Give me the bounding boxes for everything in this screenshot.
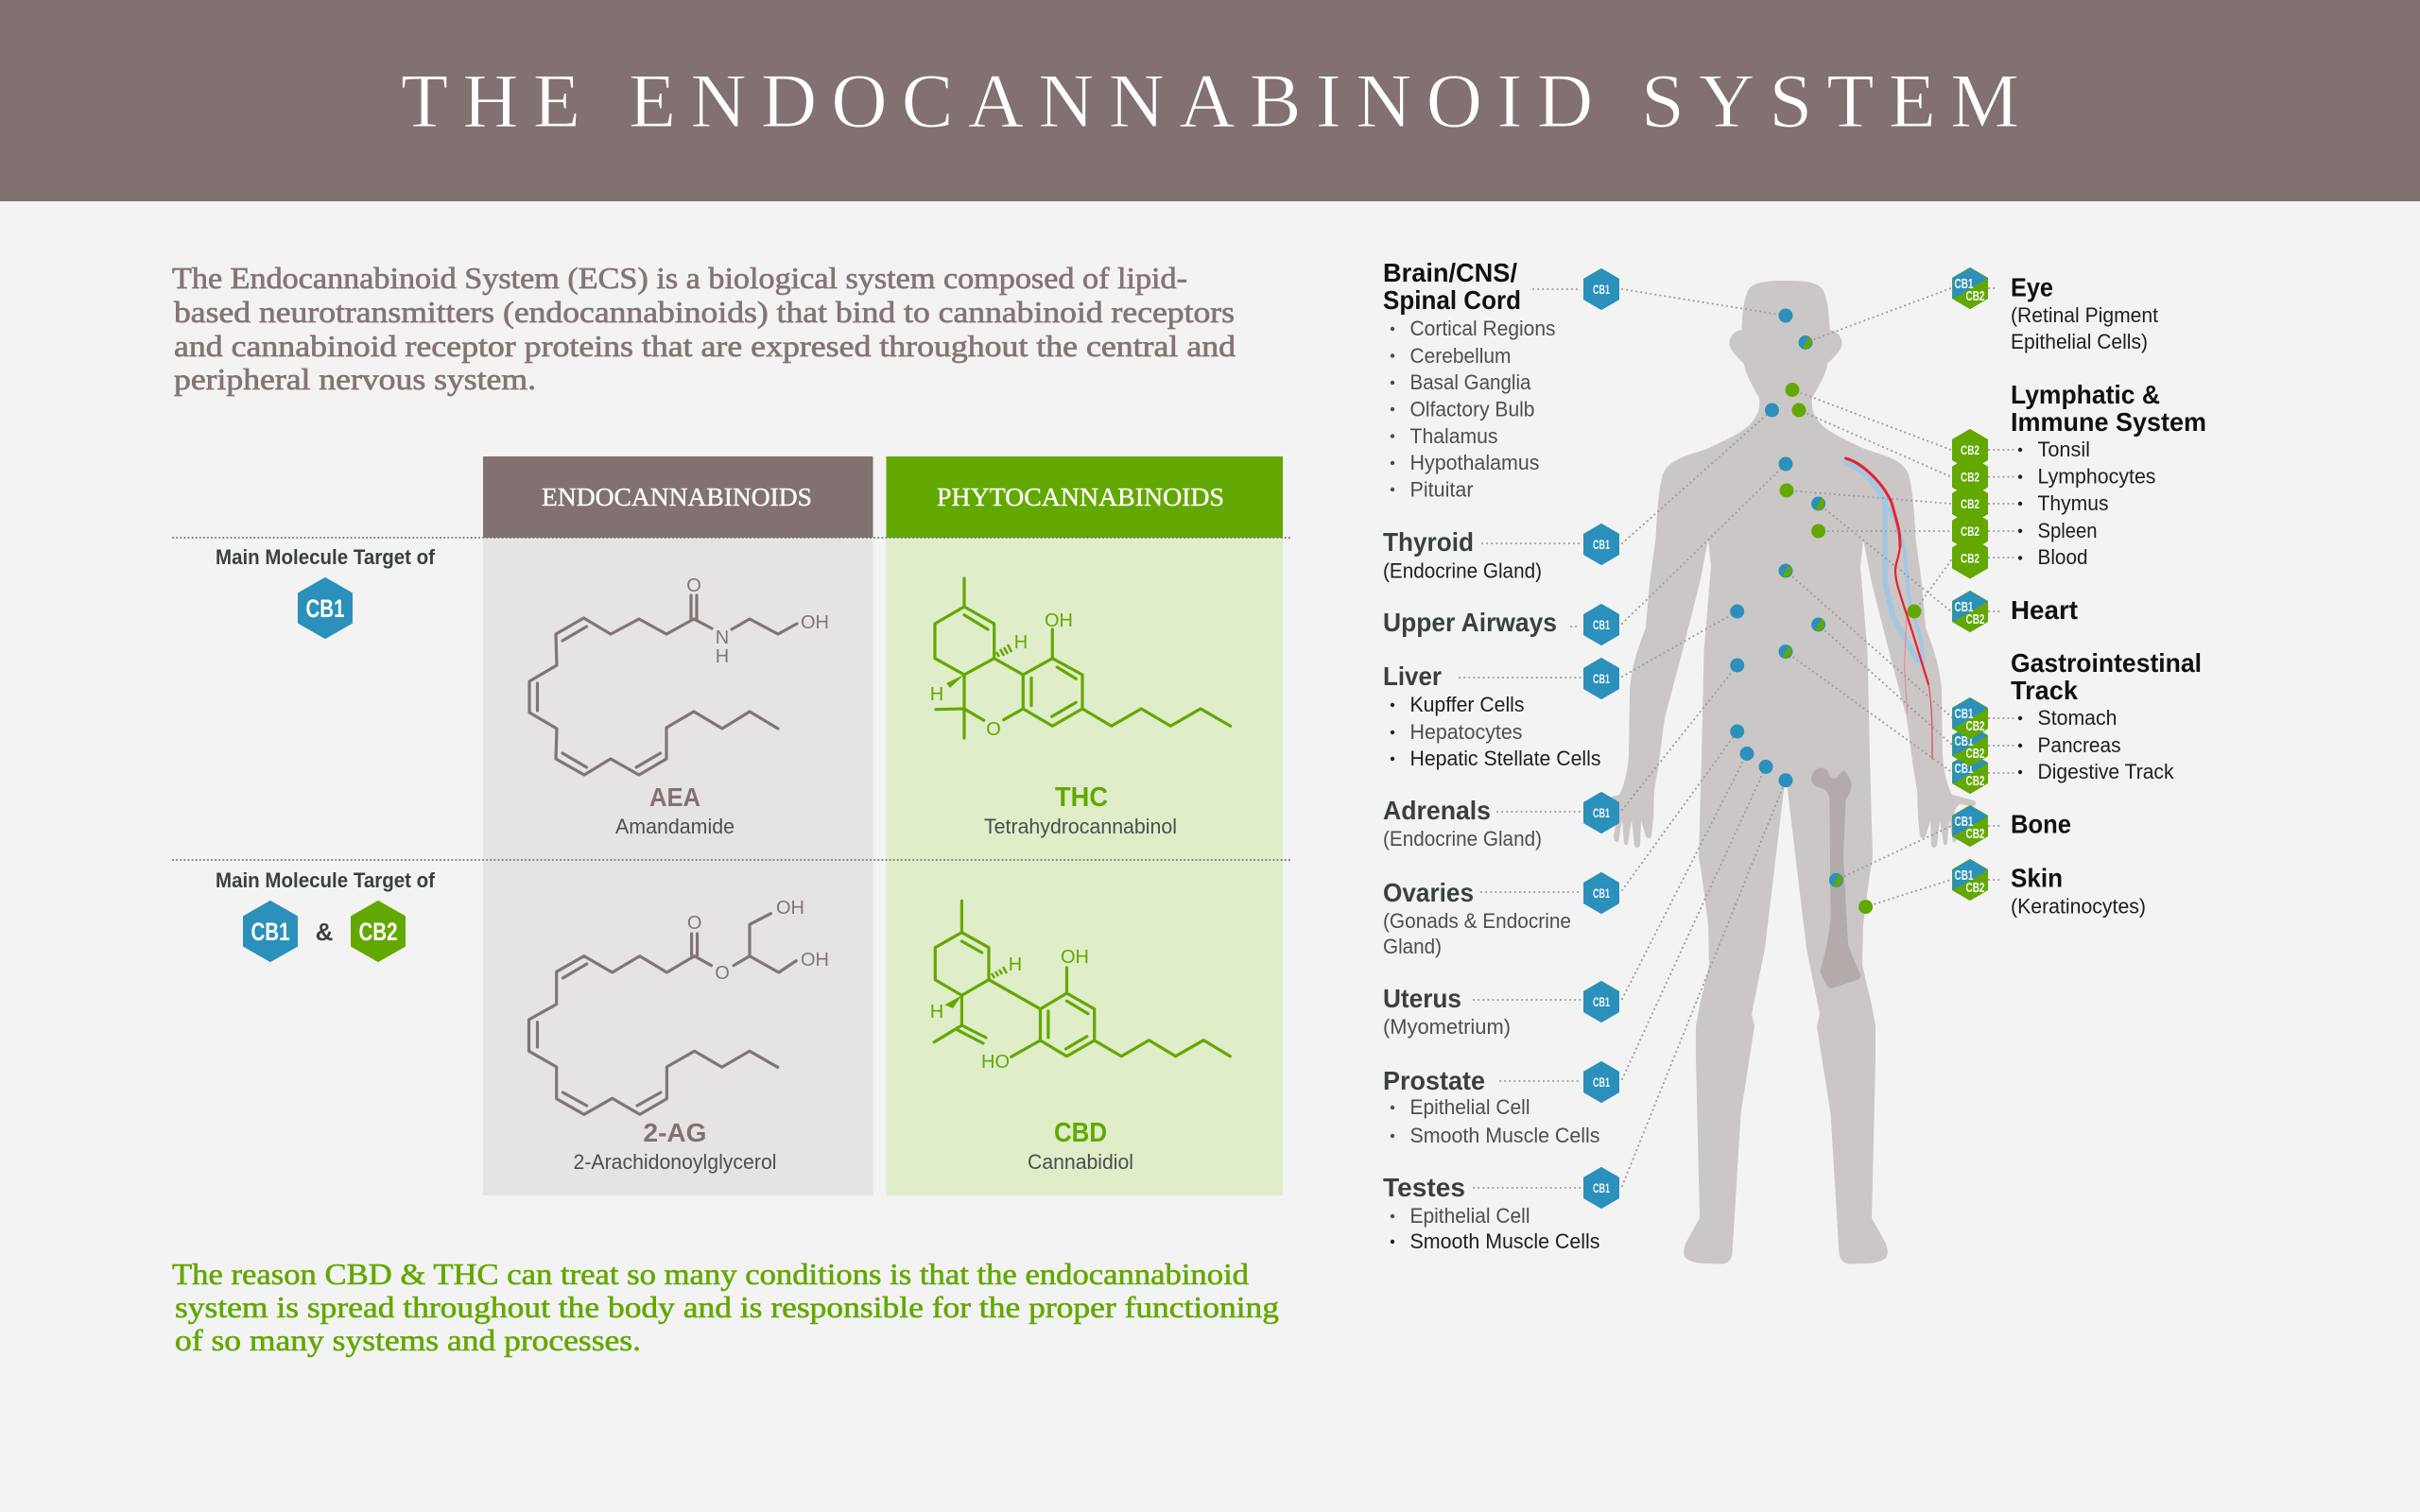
label: brain: Brain/CNS/ xyxy=(1383,258,1517,287)
title banner xyxy=(0,0,2420,201)
label: uterus: (Myometrium) xyxy=(1383,1015,1511,1039)
row label: CB1 and CB2 target: Main Molecule Target of xyxy=(216,868,436,892)
molecule: THC: H xyxy=(930,684,943,705)
label: brain xyxy=(1383,258,1556,501)
CB1 and CB2 hexagon stack: gastrointestinal: CB1 xyxy=(1955,733,1974,749)
label: bone: Bone xyxy=(2011,809,2071,839)
intro paragraph: based neurotransmitters (endocannabinoids) that bind to cannabinoid receptors xyxy=(174,295,1235,329)
label: testes xyxy=(1383,1173,1599,1253)
label: brain: Olfactory Bulb xyxy=(1410,397,1535,421)
row label: CB1 target: CB1 xyxy=(306,594,344,623)
label: lymphatic and immune system: Spleen xyxy=(2038,519,2097,542)
label: gastrointestinal track: Gastrointestinal xyxy=(2011,648,2202,678)
label: brain: Cortical Regions xyxy=(1410,317,1556,340)
CB1 and CB2 hexagon: eye xyxy=(1953,268,1987,308)
CB1 hexagon: uterus xyxy=(1584,982,1618,1022)
molecule: 2-AG: 2-Arachidonoylglycerol xyxy=(573,1150,777,1174)
CB1 and CB2 hexagon: skin xyxy=(1953,860,1987,900)
molecule: 2-AG xyxy=(529,898,829,1174)
label: thyroid xyxy=(1383,527,1542,582)
title banner: THE ENDOCANNABINOID SYSTEM xyxy=(401,58,2019,144)
CB1 and CB2 hexagon stack: gastrointestinal: CB2 xyxy=(1966,746,1985,762)
row label: CB1 and CB2 target: & xyxy=(316,918,333,946)
label: liver xyxy=(1383,662,1601,770)
panel: endocannabinoids column: ENDOCANNABINOIDS xyxy=(542,483,812,511)
molecule: 2-AG: O xyxy=(715,963,730,984)
CB1 hexagon: ovaries xyxy=(1584,873,1618,913)
label: lymphatic and immune system: Thymus xyxy=(2038,491,2108,515)
molecule: AEA: N xyxy=(716,627,729,648)
label: gastrointestinal track: Track xyxy=(2011,676,2078,705)
molecule: THC: Tetrahydrocannabinol xyxy=(984,815,1177,838)
molecule: AEA: AEA xyxy=(649,782,700,812)
label: adrenals: Adrenals xyxy=(1383,796,1491,825)
CB1 and CB2 hexagon: eye: CB2 xyxy=(1966,288,1985,304)
label: brain: Basal Ganglia xyxy=(1410,370,1531,394)
molecule: THC xyxy=(930,578,1231,838)
molecule: AEA: Amandamide xyxy=(615,815,735,838)
CB2 hexagon stack: lymphatic and immune: CB2 xyxy=(1961,442,1979,457)
label: testes: Epithelial Cell xyxy=(1410,1204,1530,1228)
CB1 hexagon: brain xyxy=(1584,269,1618,309)
molecule: 2-AG: 2-AG xyxy=(643,1118,707,1147)
CB2 hexagon stack: lymphatic and immune: CB2 xyxy=(1961,496,1979,511)
label: prostate: Smooth Muscle Cells xyxy=(1410,1124,1599,1147)
receptor dots on body xyxy=(1730,308,1921,914)
label: brain: Hypothalamus xyxy=(1410,451,1539,474)
intro paragraph xyxy=(172,261,1236,396)
molecule: CBD xyxy=(930,901,1230,1174)
label: prostate: Epithelial Cell xyxy=(1410,1095,1530,1119)
molecule: CBD: Cannabidiol xyxy=(1028,1150,1133,1174)
label: brain: Pituitar xyxy=(1410,478,1473,501)
label: lymphatic and immune system: Lymphocytes xyxy=(2038,465,2155,489)
label: eye: Eye xyxy=(2011,272,2053,302)
label: ovaries xyxy=(1383,878,1571,958)
label: lymphatic and immune system: Immune System xyxy=(2011,407,2206,437)
CB1 and CB2 hexagon stack: gastrointestinal xyxy=(1953,698,1987,793)
CB1 hexagon: thyroid: CB1 xyxy=(1593,537,1610,552)
molecule: CBD: CBD xyxy=(1054,1118,1107,1148)
molecule: THC: H xyxy=(1014,632,1028,653)
label: eye xyxy=(2011,272,2158,353)
label: skin: Skin xyxy=(2011,864,2063,892)
panel: endocannabinoids column xyxy=(483,456,873,1195)
label: liver: Liver xyxy=(1383,662,1442,691)
intro paragraph: and cannabinoid receptor proteins that are expresed throughout the central and xyxy=(174,329,1236,363)
CB2 dots xyxy=(1779,336,1921,914)
row dividers xyxy=(173,538,1290,860)
label: gastrointestinal track: Stomach xyxy=(2038,706,2118,730)
label: gastrointestinal track xyxy=(2011,648,2202,783)
molecule: 2-AG: OH xyxy=(801,950,829,971)
CB1 and CB2 hexagon: bone xyxy=(1953,806,1987,846)
CB1 hexagon: liver xyxy=(1584,659,1618,698)
molecule: AEA xyxy=(529,576,829,838)
label: ovaries: Gland) xyxy=(1383,935,1442,958)
CB1 and CB2 hexagon stack: gastrointestinal: CB1 xyxy=(1955,706,1974,722)
CB2 hexagon stack: lymphatic and immune: CB2 xyxy=(1961,470,1979,485)
conclusion paragraph xyxy=(172,1257,1279,1357)
molecule: 2-AG: O xyxy=(687,913,701,934)
label: lymphatic and immune system xyxy=(2011,380,2206,569)
label: prostate: Prostate xyxy=(1383,1066,1485,1095)
label: lymphatic and immune system: Lymphatic & xyxy=(2011,380,2160,409)
arm blood vessels xyxy=(1845,458,1932,759)
label: testes: Testes xyxy=(1383,1173,1465,1202)
CB1 and CB2 hexagon: heart xyxy=(1953,592,1987,631)
CB1 and CB2 hexagon: skin: CB2 xyxy=(1966,880,1985,896)
CB1 and CB2 hexagon: eye: CB1 xyxy=(1955,276,1974,292)
panel: phytocannabinoids column: PHYTOCANNABINOIDS xyxy=(937,483,1224,511)
label: upper airways: Upper Airways xyxy=(1383,608,1557,637)
label: liver: Hepatocytes xyxy=(1410,720,1522,744)
row label: CB1 target: Main Molecule Target of xyxy=(216,545,436,569)
row label: CB1 and CB2 target: CB1 xyxy=(251,918,289,946)
label: gastrointestinal track: Pancreas xyxy=(2038,733,2121,757)
CB1 hexagon: liver: CB1 xyxy=(1593,671,1610,686)
label: adrenals xyxy=(1383,796,1542,850)
CB1 hexagon: adrenals: CB1 xyxy=(1593,805,1610,820)
molecule: THC: O xyxy=(986,719,1001,740)
body silhouette xyxy=(1596,281,1976,1264)
CB1 and CB2 hexagon: heart: CB1 xyxy=(1955,599,1974,615)
molecule: THC: THC xyxy=(1055,782,1108,813)
label: uterus xyxy=(1383,984,1511,1039)
CB1 hexagon: prostate xyxy=(1584,1062,1618,1102)
CB1 hexagon: uterus: CB1 xyxy=(1593,994,1610,1009)
label: brain: Cerebellum xyxy=(1410,344,1511,368)
row label: CB1 and CB2 target xyxy=(216,868,436,961)
CB1 dots xyxy=(1730,308,1843,887)
conclusion paragraph: of so many systems and processes. xyxy=(175,1323,641,1357)
CB1 and CB2 hexagon stack: gastrointestinal: CB2 xyxy=(1966,718,1985,734)
conclusion paragraph: The reason CBD & THC can treat so many conditions is that the endocannabinoid xyxy=(172,1257,1249,1291)
CB1 and CB2 hexagon stack: gastrointestinal: CB1 xyxy=(1955,761,1974,777)
label: thyroid: Thyroid xyxy=(1383,527,1474,557)
label: ovaries: (Gonads & Endocrine xyxy=(1383,909,1571,933)
molecule: AEA: H xyxy=(716,646,729,667)
row label: CB1 target xyxy=(216,545,436,638)
molecule: THC: OH xyxy=(1045,610,1073,631)
molecule: AEA: OH xyxy=(801,612,829,633)
CB1 hexagon: upper airways: CB1 xyxy=(1593,617,1610,632)
molecule: CBD: HO xyxy=(981,1052,1010,1073)
label: skin: (Keratinocytes) xyxy=(2011,894,2146,919)
label: gastrointestinal track: Digestive Track xyxy=(2038,760,2174,783)
CB1 hexagon: thyroid xyxy=(1584,524,1618,564)
molecule: AEA: O xyxy=(686,576,701,596)
label: lymphatic and immune system: Tonsil xyxy=(2038,438,2090,461)
label: ovaries: Ovaries xyxy=(1383,878,1474,907)
molecule: CBD: OH xyxy=(1061,947,1089,968)
molecule: 2-AG: OH xyxy=(776,898,804,919)
label: prostate xyxy=(1383,1066,1599,1147)
label: liver: Hepatic Stellate Cells xyxy=(1410,747,1601,770)
molecule: CBD: H xyxy=(1009,954,1022,975)
femur bone xyxy=(1811,767,1861,988)
molecule: CBD: H xyxy=(930,1002,943,1022)
CB1 and CB2 hexagon: bone: CB2 xyxy=(1966,826,1985,842)
CB1 and CB2 hexagon: heart: CB2 xyxy=(1966,611,1985,627)
label: thyroid: (Endocrine Gland) xyxy=(1383,559,1542,582)
CB1 hexagon: ovaries: CB1 xyxy=(1593,885,1610,901)
CB1 hexagon: adrenals xyxy=(1584,793,1618,833)
label: lymphatic and immune system: Blood xyxy=(2038,545,2087,569)
panel: phytocannabinoids column xyxy=(887,456,1283,1195)
CB2 hexagon stack: lymphatic and immune: CB2 xyxy=(1961,524,1979,539)
CB1 and CB2 hexagon: skin: CB1 xyxy=(1955,868,1974,884)
label: liver: Kupffer Cells xyxy=(1410,693,1524,716)
CB1 hexagon: testes xyxy=(1584,1168,1618,1208)
CB1 hexagon: upper airways xyxy=(1584,605,1618,644)
row label: CB1 and CB2 target: CB2 xyxy=(359,918,397,946)
label: adrenals: (Endocrine Gland) xyxy=(1383,827,1542,850)
CB1 and CB2 hexagon stack: gastrointestinal: CB2 xyxy=(1966,773,1985,789)
conclusion paragraph: system is spread throughout the body and is responsible for the proper functioning xyxy=(175,1290,1279,1324)
label: brain: Spinal Cord xyxy=(1383,285,1521,315)
intro paragraph: peripheral nervous system. xyxy=(174,362,536,396)
CB2 hexagon stack: lymphatic and immune: CB2 xyxy=(1961,550,1979,565)
label: testes: Smooth Muscle Cells xyxy=(1410,1229,1599,1253)
CB1 hexagon: prostate: CB1 xyxy=(1593,1074,1610,1090)
CB2 hexagon stack: lymphatic and immune xyxy=(1953,430,1987,577)
CB1 hexagon: brain: CB1 xyxy=(1593,282,1610,297)
label: skin xyxy=(2011,864,2146,919)
label: heart: Heart xyxy=(2011,595,2078,625)
CB1 and CB2 hexagon: bone: CB1 xyxy=(1955,814,1974,830)
connector lines xyxy=(1460,288,2014,1188)
intro paragraph: The Endocannabinoid System (ECS) is a biological system composed of lipid- xyxy=(172,261,1187,295)
label: eye: Epithelial Cells) xyxy=(2011,330,2148,353)
CB1 hexagon: testes: CB1 xyxy=(1593,1180,1610,1195)
label: brain: Thalamus xyxy=(1410,424,1497,448)
label: uterus: Uterus xyxy=(1383,984,1461,1013)
label: eye: (Retinal Pigment xyxy=(2011,303,2158,327)
